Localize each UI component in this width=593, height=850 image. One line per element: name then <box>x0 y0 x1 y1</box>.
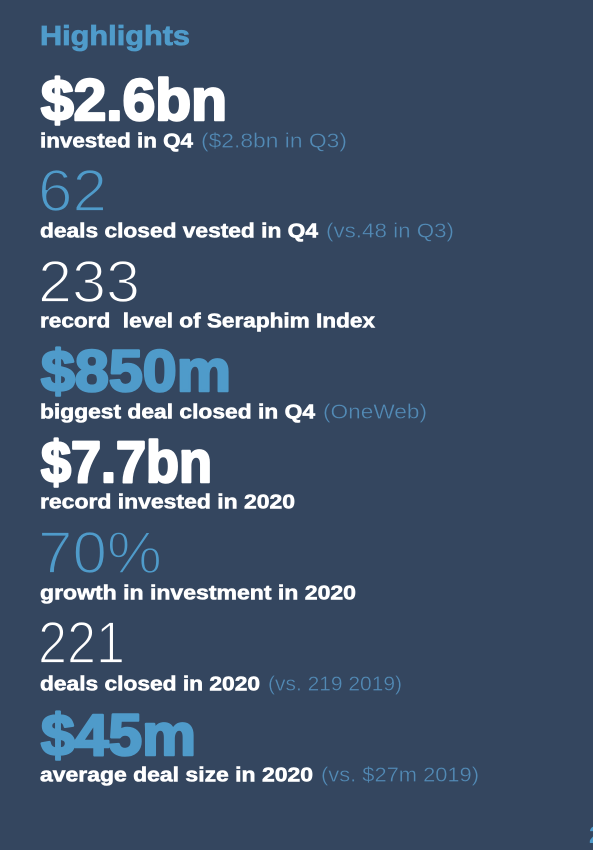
stat: $45m average deal size: average deal size in 2020 <box>40 764 313 786</box>
stat: 70% growth: growth in investment in 2020 <box>40 582 356 604</box>
stat: 70% growth: 70% <box>38 520 162 586</box>
stat: $850m biggest deal: biggest deal closed in Q4 <box>40 402 316 424</box>
stat: $45m average deal size: $45m <box>41 703 196 768</box>
stat: $45m average deal size <box>40 703 479 786</box>
stat: $2.6bn invested in Q4 <box>40 68 347 152</box>
stat: 62 deals closed: (vs.48 in Q3) <box>326 220 454 242</box>
stat: 221 deals closed <box>38 610 402 696</box>
stat: 62 deals closed: 62 <box>38 158 107 224</box>
stat: $850m biggest deal: (OneWeb) <box>323 402 427 424</box>
stat: 233 Seraphim Index <box>38 249 375 332</box>
stat: $2.6bn invested in Q4: invested in Q4 <box>40 130 194 152</box>
stat: $7.7bn record invested: record invested in 2020 <box>40 492 295 514</box>
stat: 221 deals closed: 221 <box>38 610 125 676</box>
stat: $850m biggest deal: $850m <box>41 339 231 404</box>
stat: 233 Seraphim Index: record level of Seraphim Index <box>40 310 375 332</box>
stat: 221 deals closed: deals closed in 2020 <box>40 674 260 696</box>
stat: 221 deals closed: (vs. 219 2019) <box>268 674 402 696</box>
stat: 62 deals closed: deals closed vested in Q4 <box>40 220 319 242</box>
stat: 70% growth <box>38 520 356 604</box>
stat: $7.7bn record invested <box>40 430 295 514</box>
title: Highlights <box>40 20 190 51</box>
stat: $45m average deal size: (vs. $27m 2019) <box>321 764 479 786</box>
stat: $850m biggest deal <box>40 339 427 424</box>
stat: $2.6bn invested in Q4: $2.6bn <box>41 68 227 133</box>
stat: $2.6bn invested in Q4: ($2.8bn in Q3) <box>201 130 347 152</box>
stat: 233 Seraphim Index: 233 <box>38 249 140 315</box>
stat: $7.7bn record invested: $7.7bn <box>41 430 212 495</box>
stat: 62 deals closed <box>38 158 454 242</box>
